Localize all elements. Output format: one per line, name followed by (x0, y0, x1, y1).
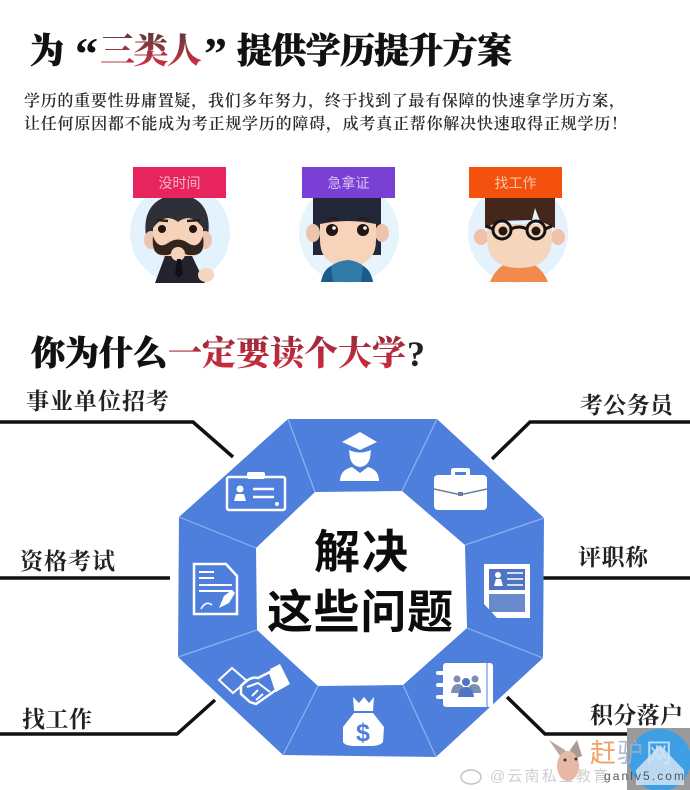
watermark: site badge (627, 728, 690, 790)
section heading: 你为什么 (31, 335, 170, 373)
octagon diagram (178, 419, 544, 757)
watermark: weibo logo (461, 770, 481, 784)
connector lines (0, 422, 690, 734)
watermark: site url: ganlv5.com (604, 769, 684, 783)
title (30, 28, 512, 79)
section heading: 一定要读个大学 (168, 334, 406, 373)
intro paragraph: 让任何原因都不能成为考正规学历的障碍，成考真正帮你解决快速取得正规学历！ (24, 114, 627, 133)
labels: 评职称 (578, 545, 650, 570)
label: no time: 没时间 (158, 175, 200, 191)
persona: urgent certificate (299, 167, 399, 283)
watermark (461, 728, 690, 790)
watermark: site name: 驴 (617, 738, 643, 768)
center text (267, 526, 453, 638)
labels: 事业单位招考 (26, 389, 169, 414)
icon: notebook with people (438, 663, 493, 707)
labels: 积分落户 (590, 703, 683, 728)
labels (20, 389, 683, 732)
section heading (31, 334, 425, 374)
center text: 解决 (314, 526, 408, 578)
title: 三类人 (100, 32, 202, 71)
watermark: site name: 网 (646, 738, 672, 768)
title: ” (204, 28, 227, 79)
watermark: site name (590, 738, 672, 768)
watermark: site name: 赶 (590, 738, 616, 768)
watermark: donkey head (549, 740, 582, 781)
label: job seeker: 找工作 (494, 175, 536, 191)
icon: briefcase (434, 468, 487, 510)
persona: job seeker (468, 167, 568, 283)
center text: 这些问题 (267, 586, 453, 638)
labels: 找工作 (22, 707, 92, 732)
intro paragraph (24, 91, 627, 133)
watermark: weibo handle: @云南私立教育 (490, 768, 608, 785)
section heading: ? (407, 334, 425, 374)
icon: handshake (219, 664, 290, 704)
labels: 考公务员 (580, 393, 676, 418)
title: “ (75, 28, 98, 79)
labels: 资格考试 (20, 549, 115, 574)
intro paragraph: 学历的重要性毋庸置疑，我们多年努力，终于找到了最有保障的快速拿学历方案， (24, 91, 625, 110)
icon: id card (227, 472, 285, 510)
icon: graduate (340, 432, 379, 481)
icon: resume (484, 564, 530, 618)
icon: money bag: $ (356, 719, 370, 747)
persona: no time (130, 167, 230, 283)
title: 提供学历提升方案 (237, 31, 512, 71)
label: urgent certificate: 急拿证 (328, 175, 370, 191)
title: 为 (30, 32, 64, 71)
icon: form with pen (194, 564, 237, 614)
icon: money bag (343, 697, 384, 747)
